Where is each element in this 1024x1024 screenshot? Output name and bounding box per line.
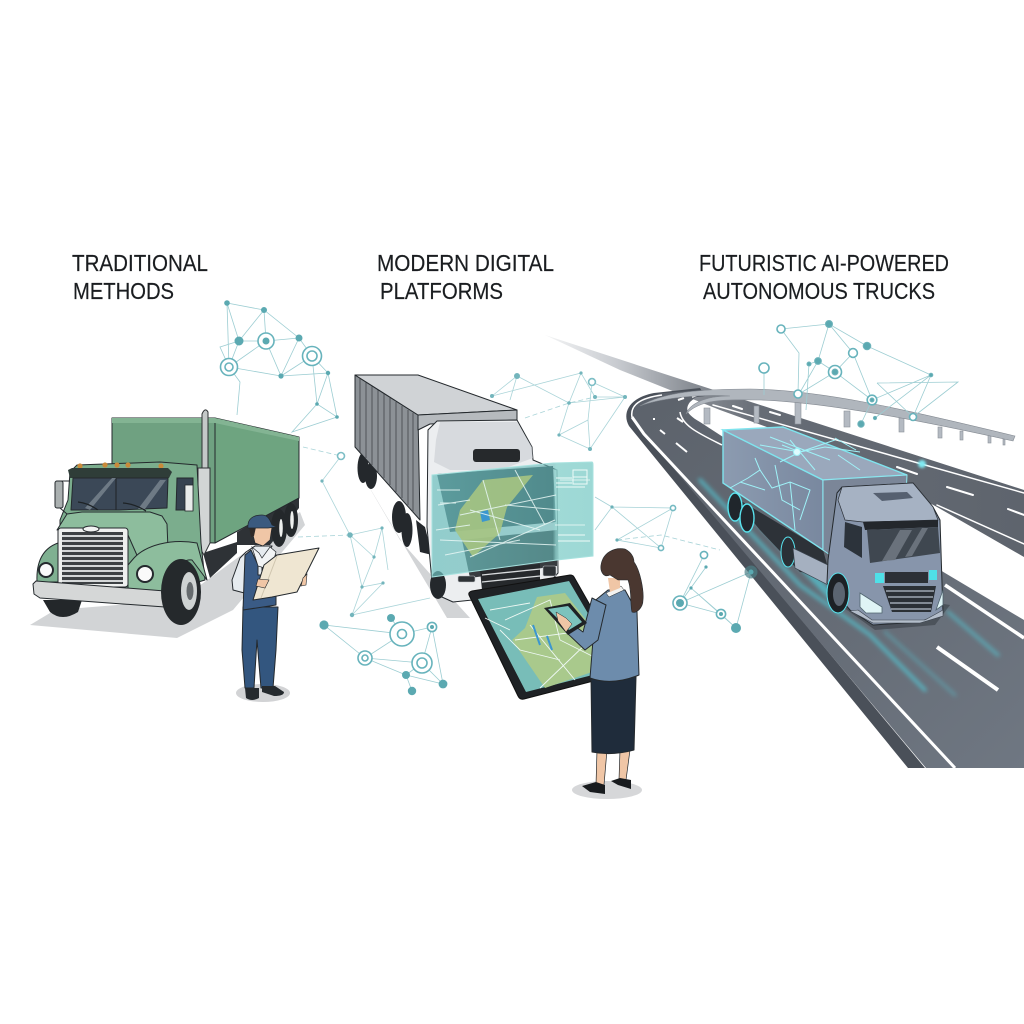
road lane markings: far road <box>713 405 1024 544</box>
front wheel <box>430 571 446 599</box>
side mirror and door window <box>55 478 193 514</box>
side window <box>844 522 862 558</box>
map region <box>512 593 598 688</box>
tablet screen <box>478 581 620 692</box>
autonomous truck <box>700 427 998 695</box>
paper map <box>253 548 319 600</box>
trailer side with ribs <box>355 375 420 520</box>
holographic trailer side <box>723 430 823 550</box>
heading: futuristic AI-powered autonomous trucks: FUTURISTIC AI-POWERED <box>699 250 949 276</box>
bridge pillars <box>704 402 1005 445</box>
heading: modern digital platforms <box>377 250 554 304</box>
network graph: lower left <box>319 614 447 695</box>
cab roof <box>838 483 938 522</box>
water areas <box>480 510 490 522</box>
network graph: top right <box>759 320 958 427</box>
network graph: top left <box>220 300 339 432</box>
white cab <box>427 420 558 602</box>
AI circuit lines on trailer <box>730 437 860 530</box>
front left wheel <box>43 600 82 617</box>
front right wheel <box>161 559 201 625</box>
tablet route lines <box>485 600 600 688</box>
hair <box>249 527 256 537</box>
network graph: top centre <box>490 371 627 451</box>
wipers <box>78 502 146 511</box>
modern white truck <box>355 375 558 618</box>
map region <box>455 475 533 557</box>
heading: traditional methods <box>72 250 208 304</box>
neck <box>608 578 620 592</box>
businesswoman using tablet <box>544 549 643 799</box>
front panel and lights <box>850 570 943 623</box>
cab body <box>60 462 205 592</box>
left fender <box>37 543 58 582</box>
large tablet with map <box>469 575 628 699</box>
overalls <box>243 550 276 610</box>
sun visor <box>68 468 172 478</box>
shirt torso and arm <box>232 546 272 595</box>
far road <box>545 335 1024 557</box>
road curb shade <box>626 388 925 768</box>
front bumper <box>33 581 167 607</box>
hands <box>256 574 307 588</box>
road lane markings: main road <box>632 394 1024 768</box>
lower grille <box>458 530 557 590</box>
heading: futuristic AI-powered autonomous trucks: AUTONOMOUS TRUCKS <box>703 278 935 304</box>
tablet frame <box>469 575 628 699</box>
chassis <box>203 542 237 578</box>
hand <box>556 612 572 632</box>
traditional truck with green cab <box>30 410 305 638</box>
main road surface <box>633 390 1024 768</box>
network graph: right of hologram <box>595 497 720 551</box>
jacket <box>590 590 639 681</box>
windshield <box>867 527 940 563</box>
heading: traditional methods: METHODS <box>73 278 174 304</box>
heading: traditional methods: TRADITIONAL <box>72 250 208 276</box>
worker reading a map <box>232 515 319 702</box>
bridge overpass <box>640 389 1015 445</box>
holographic map panel <box>432 462 593 577</box>
windshield <box>437 466 556 532</box>
network graph: centre left <box>298 447 430 617</box>
exhaust stack <box>198 410 210 555</box>
small tablet in hand <box>544 603 587 635</box>
cab body <box>827 483 943 625</box>
hologram data widget <box>556 470 590 541</box>
heading: modern digital platforms: PLATFORMS <box>380 278 503 304</box>
trailer top <box>355 375 517 415</box>
headlights <box>39 563 153 582</box>
blouse collar <box>606 586 624 597</box>
shirt collar <box>252 547 276 570</box>
cyan light trails <box>700 480 998 695</box>
rear wheels and chassis <box>728 493 838 590</box>
truck road shadow <box>840 600 950 630</box>
head <box>251 527 272 546</box>
cap <box>248 515 277 528</box>
hair <box>601 549 643 612</box>
left and right legs <box>242 607 278 688</box>
heading: futuristic AI-powered autonomous trucks <box>699 250 949 304</box>
green trailer side <box>215 418 299 543</box>
reaching arm <box>566 598 606 650</box>
rear wheels <box>358 453 432 555</box>
trailer underside <box>237 496 299 545</box>
ground shadow <box>572 781 642 799</box>
legs <box>596 750 630 785</box>
glowing node <box>918 460 926 468</box>
hood <box>57 512 168 562</box>
trailer rear wheels <box>271 503 298 547</box>
shoes <box>245 686 284 700</box>
truck ground shadow <box>30 512 305 638</box>
skirt <box>591 677 636 754</box>
sun visor <box>863 520 938 530</box>
trailer front face <box>823 475 907 557</box>
network graph: lower right <box>673 551 758 633</box>
roof hatch <box>873 492 913 501</box>
grille <box>58 526 128 587</box>
cab roof vent <box>473 449 520 462</box>
heading: modern digital platforms: MODERN DIGITAL <box>377 250 554 276</box>
right fender <box>128 541 207 592</box>
ground shadow <box>355 463 470 618</box>
ground shadow <box>236 684 290 702</box>
green trailer front <box>112 418 215 543</box>
front wheel <box>827 573 849 613</box>
holographic trailer top <box>723 427 907 480</box>
windshield <box>71 478 168 510</box>
amber roof lights <box>77 462 164 469</box>
route lines <box>436 470 590 557</box>
shoes <box>582 778 631 794</box>
